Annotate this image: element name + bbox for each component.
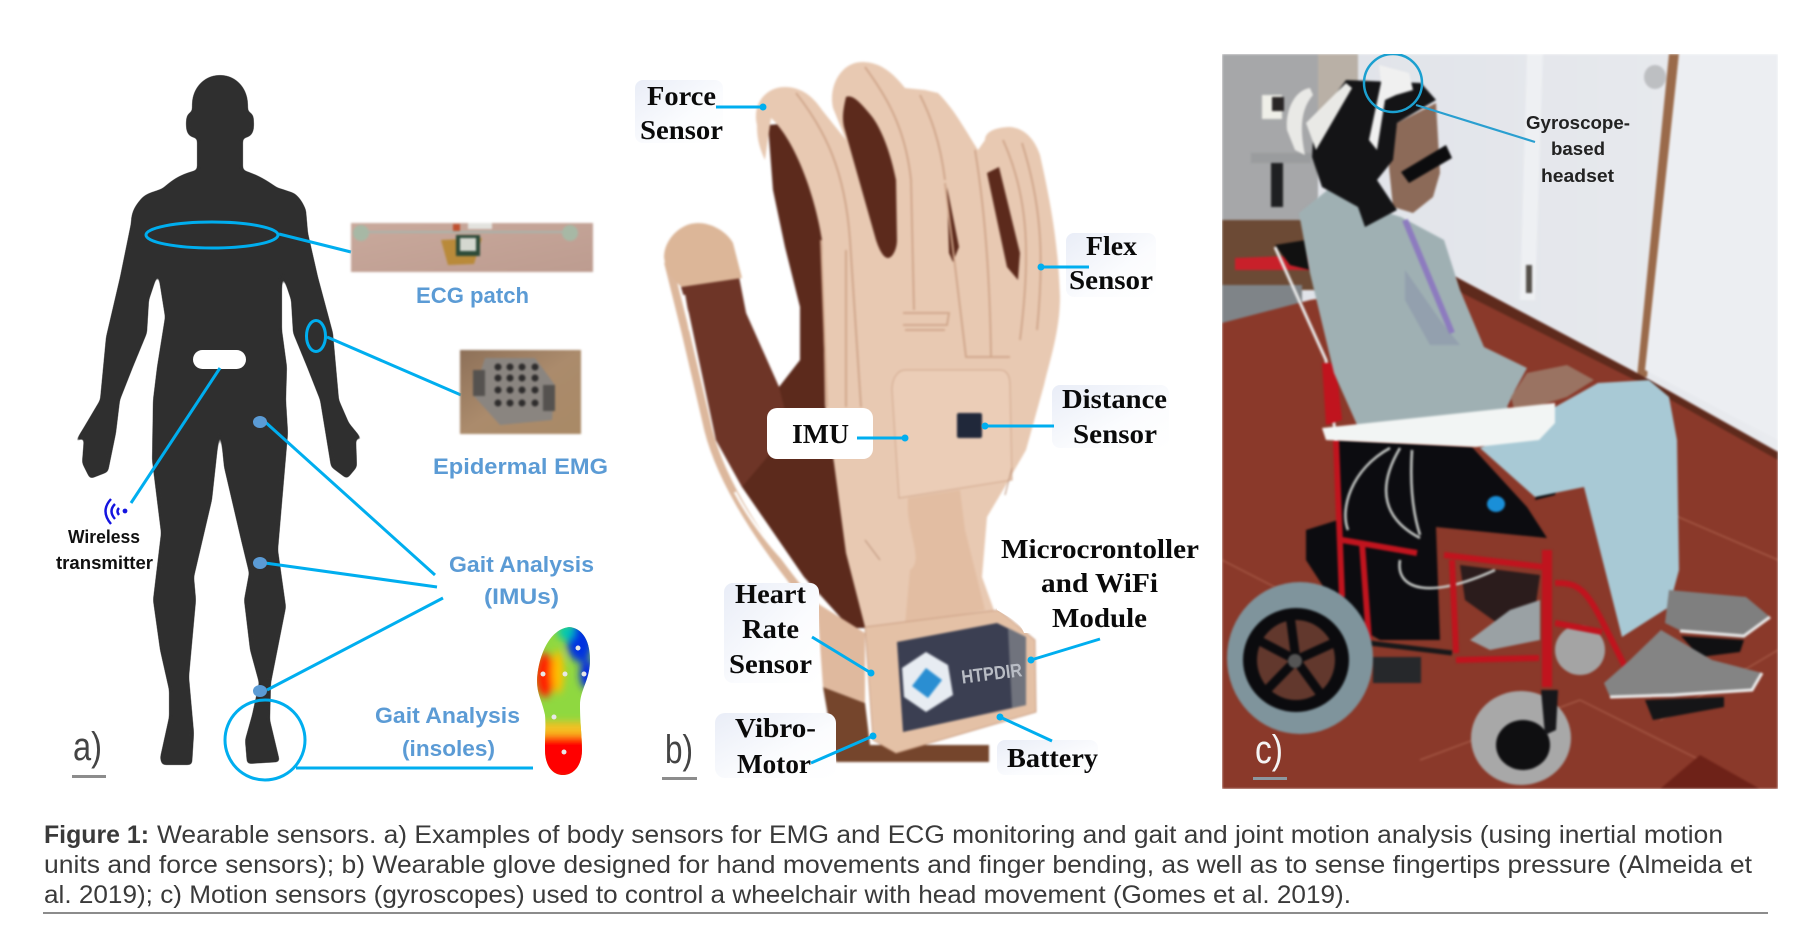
headset label: headset	[1541, 166, 1614, 186]
insole gait label: (insoles)	[402, 736, 495, 761]
insole sensor points	[540, 646, 586, 754]
ECG patch photo	[351, 223, 593, 272]
icon: wireless signal	[106, 499, 126, 524]
distance sensor label: Sensor	[1073, 419, 1157, 449]
caption: units and force sensors); b) Wearable glove designed for hand movements and finger bending, as well as to sense fingertips pressure (Almeida et	[44, 851, 1752, 879]
heart rate sensor label: Rate	[742, 614, 799, 644]
headset callout	[1364, 54, 1535, 142]
vibro-motor label: Motor	[737, 749, 811, 779]
sensor dots	[253, 416, 267, 697]
IMU gait label	[449, 552, 594, 609]
force sensor label: Sensor	[640, 115, 723, 145]
panel letter c	[1253, 734, 1287, 780]
microcontroller label: and WiFi	[1041, 568, 1159, 598]
glove photo	[664, 62, 1060, 762]
label backgrounds	[635, 80, 1205, 778]
panel letter c: c)	[1255, 728, 1283, 772]
panel letter b: b)	[665, 728, 693, 772]
glove callout dots	[760, 104, 1044, 740]
force sensor label: Force	[647, 81, 716, 111]
wireless label: transmitter	[56, 553, 153, 573]
HTPDIR logo text: HTPDIR	[960, 660, 1024, 689]
body silhouette	[73, 75, 367, 765]
microcontroller label	[1001, 534, 1199, 633]
distance sensor label: Distance	[1062, 384, 1167, 414]
headset label: based	[1551, 139, 1605, 159]
IMU gait label: (IMUs)	[484, 584, 559, 609]
vibro-motor label: Vibro-	[735, 713, 816, 743]
EMG label: Epidermal EMG	[433, 454, 608, 479]
flex sensor label: Flex	[1086, 231, 1138, 261]
room background	[1222, 54, 1778, 789]
distance sensor label	[1062, 384, 1167, 449]
headset label: Gyroscope-	[1526, 113, 1630, 133]
flex sensor label: Sensor	[1069, 265, 1153, 295]
IMU label: IMU	[792, 419, 849, 449]
EMG patch photo	[460, 350, 581, 434]
panel a: body sensors	[56, 75, 608, 780]
glove callout lines	[716, 107, 1100, 763]
caption: al. 2019); c) Motion sensors (gyroscopes) used to control a wheelchair with head movement (Gomes et al. 2019).	[44, 881, 1351, 909]
caption	[43, 821, 1768, 914]
battery label: Battery	[1007, 743, 1099, 773]
panel letter a: a)	[73, 725, 102, 769]
callout lines	[131, 222, 533, 780]
ECG label: ECG patch	[416, 283, 529, 308]
wireless label	[56, 527, 153, 573]
headset label	[1526, 116, 1630, 182]
caption: Wearable sensors. a) Examples of body sensors for EMG and ECG monitoring and gait and joint motion analysis (using inertial motion	[157, 821, 1723, 849]
panel c: wheelchair photo	[1222, 54, 1778, 789]
force sensor label	[640, 81, 723, 145]
insole gait label: Gait Analysis	[375, 703, 520, 728]
flex sensor label	[1069, 231, 1153, 295]
microcontroller label: Module	[1052, 603, 1147, 633]
transmitter pill	[193, 350, 246, 369]
vibro-motor label	[735, 713, 816, 779]
panel b: sensor glove	[635, 62, 1205, 780]
wheelchair	[1227, 153, 1637, 785]
microcontroller label: Microcrontoller	[1001, 534, 1199, 564]
caption: Figure 1:	[44, 821, 149, 849]
heart rate sensor label	[729, 579, 812, 679]
IMU gait label: Gait Analysis	[449, 552, 594, 577]
person	[1287, 65, 1770, 720]
heart rate sensor label: Heart	[735, 579, 806, 609]
insole heat map	[537, 627, 590, 775]
insole gait label	[375, 703, 520, 761]
wireless label: Wireless	[68, 527, 140, 547]
heart rate sensor label: Sensor	[729, 649, 812, 679]
